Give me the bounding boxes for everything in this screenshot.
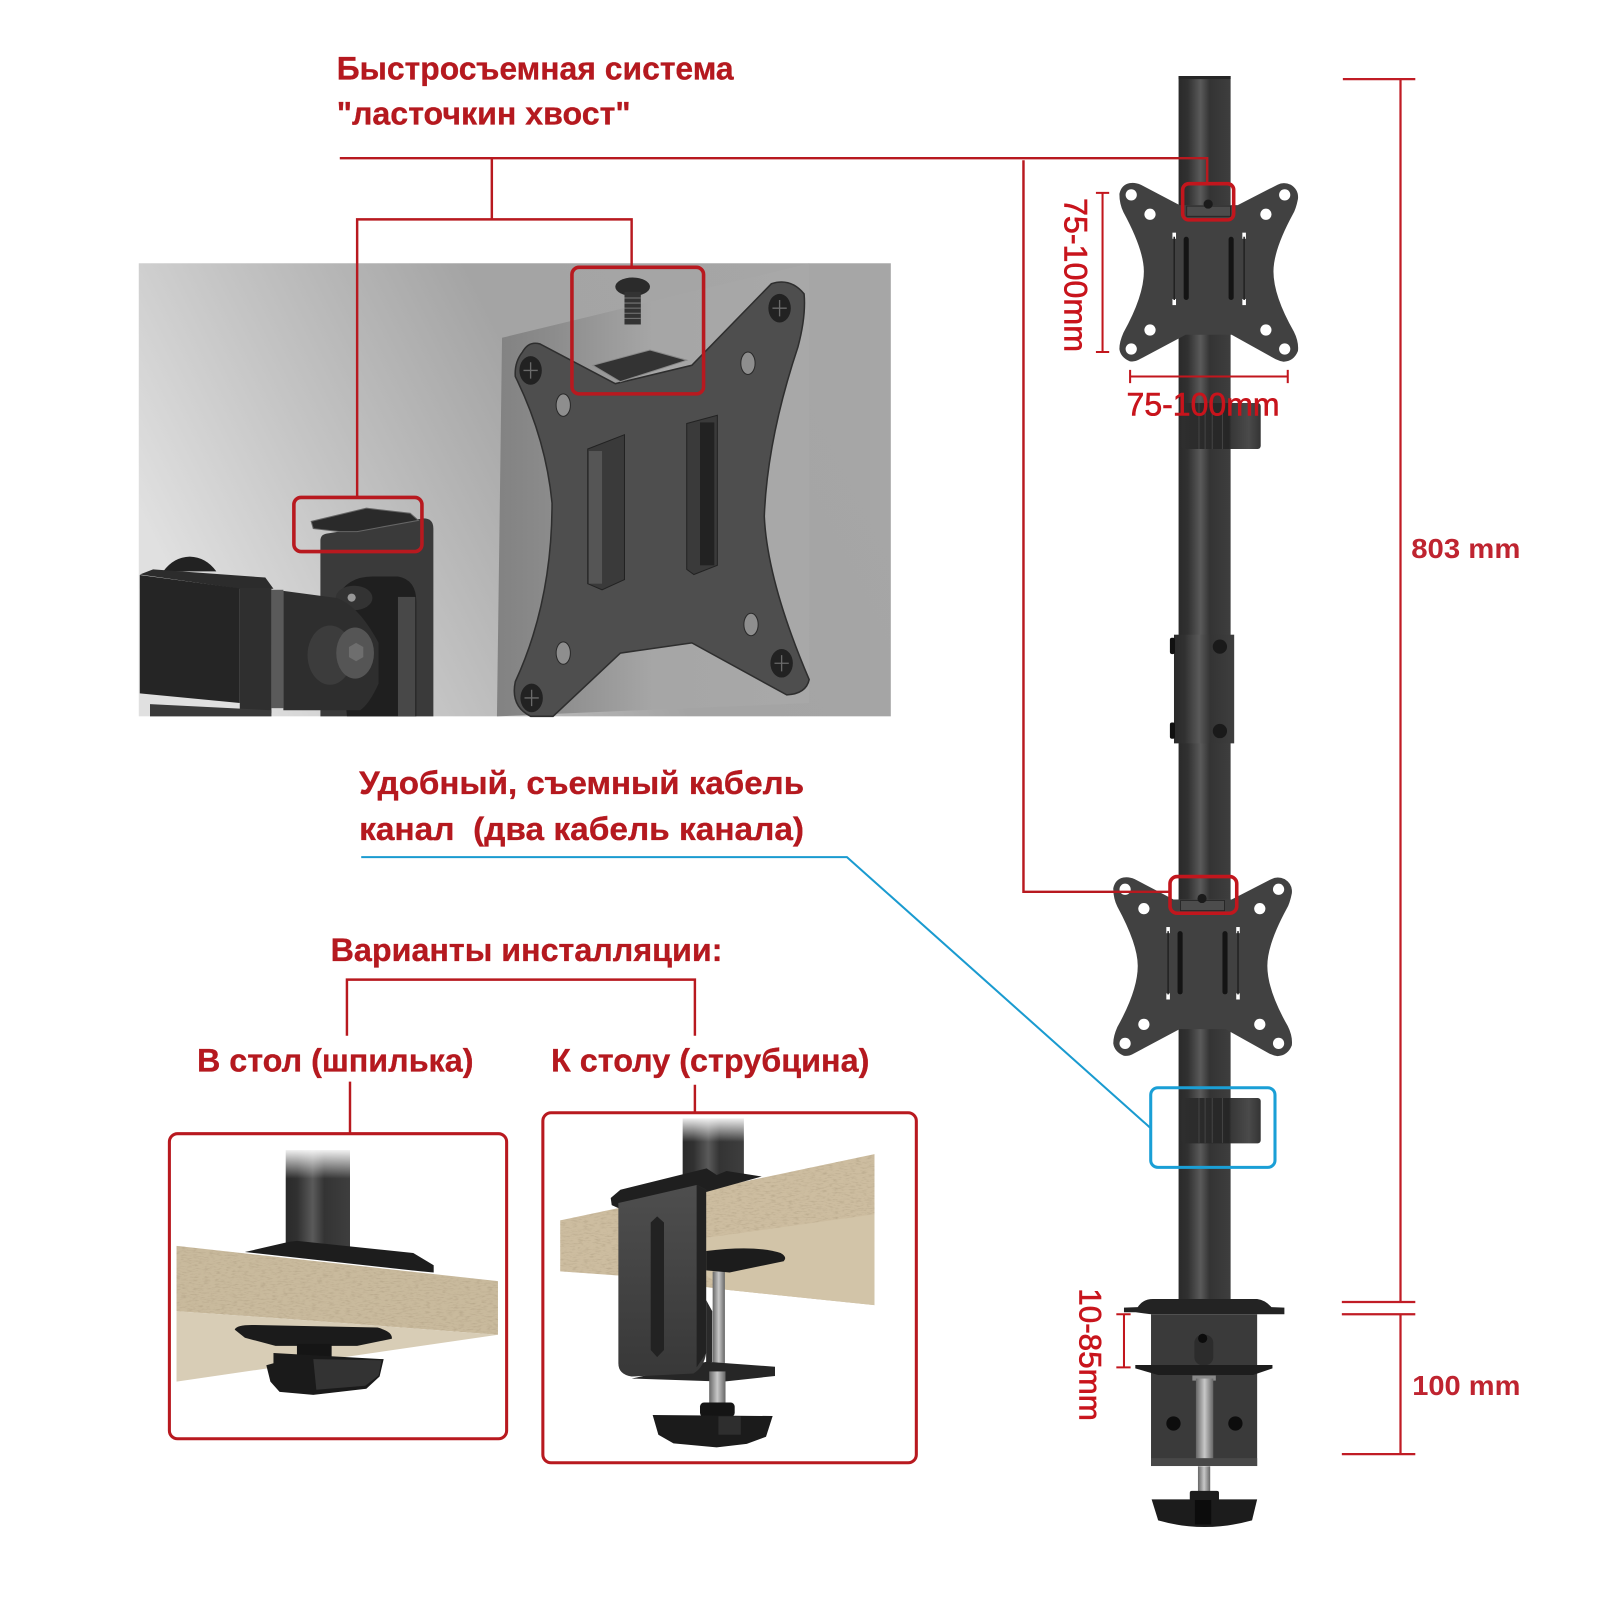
callout lines: dovetail bbox=[340, 158, 1207, 892]
wood underside bbox=[706, 1214, 874, 1305]
clamp top bbox=[611, 1168, 762, 1208]
red highlight: lower dovetail bbox=[1170, 877, 1237, 913]
product: vertical pole bbox=[1179, 76, 1231, 1303]
dimension: plate width bbox=[1127, 370, 1288, 422]
dimension: plate height: 75-100mm bbox=[1057, 198, 1094, 352]
inner flange bbox=[1135, 1365, 1272, 1375]
lower arm bbox=[632, 1362, 775, 1382]
pole bbox=[286, 1150, 350, 1252]
threaded screw bbox=[713, 1271, 725, 1363]
dimension: 803 mm: 803 mm bbox=[1411, 533, 1520, 564]
dimension: 803 mm bbox=[1342, 79, 1520, 1302]
heading: dovetail quick release bbox=[337, 50, 734, 131]
round bracket bbox=[337, 577, 416, 716]
clamp slot bbox=[651, 1216, 664, 1357]
red highlight: plate dovetail bbox=[572, 267, 704, 394]
wood underside bbox=[177, 1311, 498, 1382]
slot bbox=[1194, 1334, 1213, 1365]
fade on pole bbox=[284, 1148, 352, 1209]
side bolts bbox=[1166, 1416, 1243, 1431]
pole bbox=[683, 1118, 744, 1180]
dimension: plate height bbox=[1057, 193, 1109, 352]
lower screw bbox=[709, 1371, 726, 1404]
photo panel: dovetail detail bbox=[139, 263, 891, 716]
dimension: clamp range: 10-85mm bbox=[1073, 1288, 1109, 1421]
clamp body bbox=[1151, 1314, 1257, 1466]
clamp right edge bbox=[697, 1185, 706, 1367]
knob bbox=[653, 1403, 773, 1447]
heading: cable channel bbox=[359, 764, 804, 847]
bracket: install options bbox=[347, 980, 695, 1134]
arm plate bbox=[283, 591, 379, 710]
top clamp plate bbox=[245, 1241, 434, 1272]
small dovetail bbox=[311, 508, 418, 532]
heading: install options: Варианты инсталляции: bbox=[331, 931, 722, 968]
dimension: clamp range bbox=[1073, 1288, 1131, 1421]
dovetail on plate bbox=[593, 350, 687, 382]
blue highlight: cable clip bbox=[1151, 1088, 1275, 1167]
VESA plate on monitor bbox=[514, 282, 809, 716]
monitor back panel bbox=[497, 263, 809, 716]
arm hinge bbox=[140, 557, 416, 716]
blue callout line bbox=[361, 857, 1150, 1128]
socket bolt bbox=[308, 626, 374, 685]
clamp body bbox=[618, 1185, 706, 1377]
loose screw bbox=[615, 278, 650, 324]
cable clip upper bbox=[1182, 403, 1261, 449]
neck bbox=[297, 1344, 332, 1357]
dimension: plate width: 75-100mm bbox=[1127, 385, 1280, 422]
panel: grommet mount bbox=[169, 1134, 507, 1439]
lower shaft bbox=[1198, 1466, 1210, 1492]
red highlight: arm dovetail bbox=[294, 497, 422, 552]
heading: dovetail quick release: Быстросъемная система bbox=[337, 50, 734, 87]
cable clip lower bbox=[1182, 1098, 1261, 1143]
upper pad bbox=[706, 1248, 785, 1272]
threaded rod bbox=[1192, 1376, 1216, 1460]
bracket ear bbox=[336, 586, 372, 610]
bottom band bbox=[1151, 1458, 1257, 1466]
dimension: 100 mm: 100 mm bbox=[1412, 1370, 1520, 1401]
wood bbox=[560, 1154, 874, 1305]
hinge dome bbox=[163, 557, 216, 571]
heading: cable channel: канал (два кабель канала) bbox=[359, 810, 804, 847]
knob bbox=[1152, 1491, 1257, 1527]
sleeve with bolts bbox=[1170, 635, 1234, 743]
heading: cable channel: Удобный, съемный кабель bbox=[359, 764, 804, 801]
top flange bbox=[1124, 1299, 1284, 1314]
light strip bbox=[271, 590, 283, 708]
fade on pole bbox=[681, 1116, 746, 1167]
back arm bbox=[706, 1300, 712, 1362]
VESA plate lower bbox=[1113, 877, 1292, 1056]
arm block bbox=[140, 575, 240, 703]
side strip bbox=[240, 588, 271, 713]
hinge flange bbox=[140, 569, 273, 589]
arm back plate bbox=[320, 518, 433, 716]
heading: dovetail quick release: "ласточкин хвост" bbox=[337, 94, 631, 131]
dimension: 100 mm bbox=[1342, 1314, 1520, 1454]
VESA plate upper bbox=[1119, 183, 1298, 362]
knob bbox=[266, 1353, 384, 1395]
panel: C-clamp mount bbox=[543, 1113, 916, 1463]
wood side bbox=[177, 1246, 498, 1335]
lower hinge bbox=[150, 704, 271, 716]
label: into table: В стол (шпилька) bbox=[197, 1041, 473, 1078]
base clamp bbox=[1124, 1299, 1284, 1527]
red highlight: upper dovetail bbox=[1183, 184, 1234, 220]
label: clamp to table: К столу (струбцина) bbox=[551, 1041, 869, 1078]
bottom flange bbox=[235, 1325, 392, 1346]
